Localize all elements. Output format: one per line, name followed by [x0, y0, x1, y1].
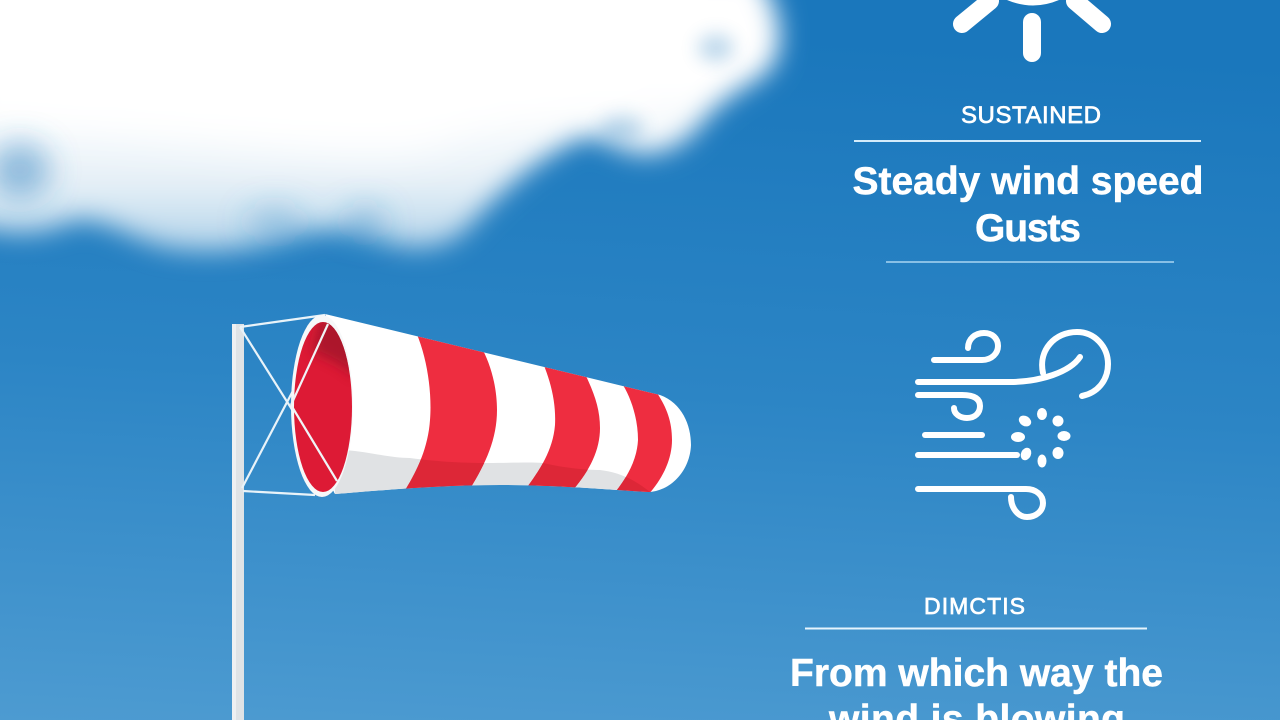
cloud: [0, 0, 780, 251]
windsock pole: [232, 324, 244, 720]
sock mouth interior: [294, 322, 352, 492]
sock mouth rim: [291, 315, 353, 497]
text: from which way the: From which way the: [790, 652, 1163, 695]
text: gusts: Gusts: [975, 207, 1081, 250]
heading: direction label: DIMCTIS: [924, 593, 1025, 619]
text: steady wind speed: Steady wind speed: [852, 160, 1204, 203]
divider: [854, 140, 1201, 142]
icon: sun rays: [962, 0, 1102, 53]
ring of dots: [1011, 408, 1070, 468]
front wires crossing mouth: [291, 324, 337, 481]
divider: [886, 261, 1174, 263]
windsock frame wires: [240, 315, 337, 495]
divider: [805, 628, 1147, 630]
heading: sustained: SUSTAINED: [961, 102, 1101, 129]
windsock: [291, 314, 691, 500]
sock body white: [325, 314, 691, 494]
red stripes: [406, 336, 672, 492]
mouth interior shading: [308, 322, 350, 378]
icon: wind with gust swirls: [918, 332, 1108, 517]
sock underside shadow: [334, 450, 646, 494]
